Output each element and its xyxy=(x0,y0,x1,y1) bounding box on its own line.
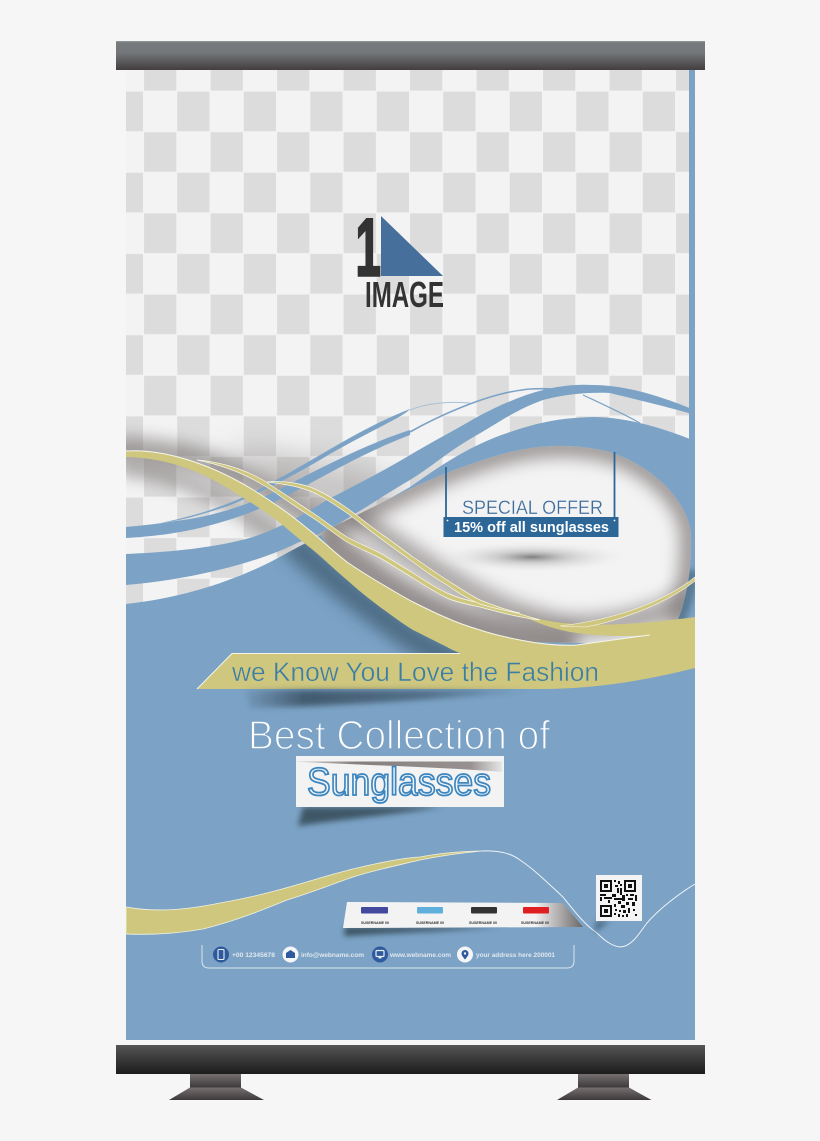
white curve line xyxy=(482,851,695,947)
swatch 1: SUSERNAME 00 xyxy=(361,921,389,925)
blue body xyxy=(126,417,695,1040)
thin yellow ribbon right xyxy=(560,577,695,627)
body shading xyxy=(279,544,695,653)
website contact: www.webname.com xyxy=(389,952,452,959)
wave ribbon: wide blue band xyxy=(126,385,692,585)
thin curved lines xyxy=(410,389,640,432)
discount text: 15% off all sunglasses xyxy=(454,520,609,536)
right stand foot xyxy=(557,1074,652,1100)
thin yellow ribbon 1 xyxy=(197,460,540,620)
address contact: your address here 200001 xyxy=(476,952,556,959)
swatch 3: SUSERNAME 00 xyxy=(469,921,497,925)
label box xyxy=(296,756,504,807)
special offer sign xyxy=(444,452,618,537)
swatch 4: SUSERNAME 00 xyxy=(521,921,549,925)
special offer heading: SPECIAL OFFER xyxy=(462,498,603,519)
strip shadow xyxy=(344,927,500,936)
address contact xyxy=(457,946,556,962)
label shadow below xyxy=(298,807,443,826)
banner panel xyxy=(110,70,695,1040)
colour options strip xyxy=(343,902,583,936)
swatch 2: SUSERNAME 00 xyxy=(416,921,444,925)
oval shadow spot xyxy=(463,546,602,568)
yellow main ribbon and banner xyxy=(126,451,695,689)
label word: Sunglasses xyxy=(307,761,491,804)
thin yellow ribbon 2 xyxy=(267,481,520,613)
yellow band right xyxy=(520,613,695,636)
swatch 2 xyxy=(416,907,444,925)
wave ribbon: narrow blue lower xyxy=(126,430,410,538)
QR code xyxy=(594,875,642,933)
logo triangle xyxy=(381,216,443,276)
banner shadow xyxy=(245,690,545,708)
checkerboard placeholder xyxy=(126,70,695,640)
lower yellow wave xyxy=(126,851,482,934)
contact box xyxy=(202,945,574,968)
left stand foot xyxy=(169,1074,264,1100)
wave ribbon: thin blue upper xyxy=(160,409,410,523)
right edge strip xyxy=(689,70,695,470)
oval highlight area xyxy=(320,446,691,645)
white edge lines on yellow xyxy=(126,451,650,689)
headline: Best Collection of xyxy=(248,712,551,758)
sunglasses label xyxy=(292,756,504,826)
discount strip xyxy=(444,517,618,537)
logo word: IMAGE xyxy=(365,274,444,315)
swatch 3 xyxy=(469,907,497,925)
swatch 1 xyxy=(361,907,389,925)
top bar xyxy=(116,41,705,70)
soft grey shading behind the ribbons xyxy=(110,449,415,560)
phone contact: +00 12345678 xyxy=(232,952,276,959)
phone contact xyxy=(213,946,276,962)
email contact xyxy=(282,946,365,962)
bottom bar xyxy=(116,1045,705,1074)
website contact xyxy=(372,946,452,962)
email contact: info@webname.com xyxy=(301,952,365,959)
logo numeral: 1 xyxy=(356,202,381,293)
logo xyxy=(356,202,444,315)
slogan: we Know You Love the Fashion xyxy=(231,657,599,687)
swatch 4 xyxy=(521,907,549,925)
